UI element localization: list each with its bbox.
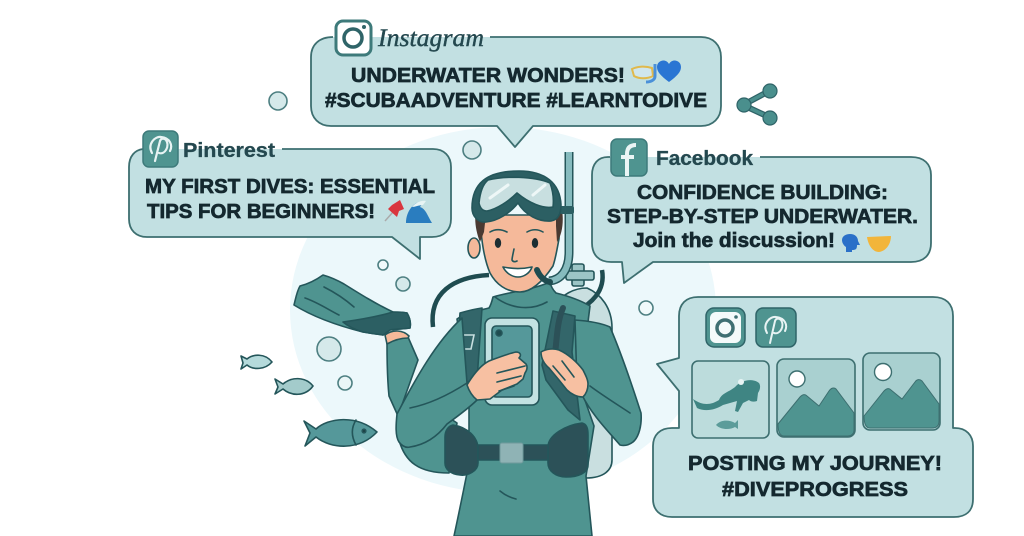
icon: pinterest small: [756, 308, 796, 347]
diver: [294, 152, 641, 536]
hair: [475, 210, 563, 242]
snorkel tube: [549, 152, 569, 281]
text: facebook post: [607, 182, 918, 252]
snorkel clip: [560, 206, 574, 214]
belt: [478, 445, 548, 460]
label: Facebook: Facebook: [656, 148, 754, 170]
label: Pinterest: Pinterest: [183, 140, 275, 162]
crotch line: [500, 491, 516, 499]
hand left: [467, 352, 527, 400]
fish: small: [241, 355, 272, 369]
icon: pinterest: [143, 131, 178, 167]
nose: [512, 249, 517, 262]
icon: instagram: [336, 21, 371, 55]
neck collar: [495, 297, 547, 308]
icon: handshake: [867, 236, 891, 252]
air hose right: [576, 270, 603, 312]
hand right: [541, 349, 588, 397]
regulator hoses on strap: [555, 308, 563, 354]
icon: share: [737, 84, 777, 125]
panel: posting journey bubble: [653, 297, 973, 517]
ear: [468, 238, 480, 258]
photo: mountains 1: [777, 359, 855, 437]
panel: facebook bubble: [592, 139, 931, 283]
text: instagram post: [325, 65, 707, 112]
harness strap left: [455, 308, 482, 384]
icon: wave: [406, 201, 432, 223]
elbow creases: [410, 383, 630, 413]
text: posting journey: POSTING MY JOURNEY!: [688, 453, 942, 475]
flipper: [294, 275, 410, 335]
bubbles: [269, 92, 653, 390]
icon: pushpin: [385, 200, 404, 221]
background water blob: [290, 127, 716, 493]
text: instagram post: UNDERWATER WONDERS!: [351, 65, 625, 87]
icon: speaking head: [842, 234, 860, 252]
face: [480, 215, 560, 292]
right arm: [575, 320, 641, 445]
phone case: [485, 318, 539, 405]
text: posting journey: [688, 453, 942, 501]
text: posting journey: #DIVEPROGRESS: [722, 479, 908, 501]
panel: instagram bubble: [311, 21, 721, 147]
icon: blue heart: [657, 60, 681, 82]
photo: diver: [692, 361, 769, 438]
diving mask: [472, 171, 561, 222]
wetsuit back: [399, 393, 457, 473]
weight pouch left: [445, 425, 478, 475]
label: Instagram: Instagram: [377, 25, 484, 52]
icon: instagram small: [706, 308, 745, 347]
harness strap right: [542, 311, 580, 420]
panel: pinterest bubble: [129, 131, 451, 259]
belt buckle: [500, 443, 523, 463]
text: facebook post: Join the discussion!: [633, 230, 835, 252]
snorkel mouthpiece: [537, 270, 550, 282]
text: pinterest post: MY FIRST DIVES: ESSENTIAL: [145, 176, 435, 198]
harness D ring: [461, 335, 474, 349]
text: pinterest post: [145, 176, 435, 223]
text: instagram post: #SCUBAADVENTURE #LEARNTODIVE: [325, 90, 707, 112]
left arm: [396, 318, 477, 447]
text: facebook post: CONFIDENCE BUILDING:: [637, 182, 888, 204]
icon: snorkel mask emoji: [632, 64, 655, 82]
torso and legs: [454, 282, 594, 536]
fish: medium: [275, 379, 313, 394]
eyebrows: [490, 230, 543, 232]
eyes: [495, 238, 538, 248]
air hose left: [433, 275, 489, 327]
text: facebook post: STEP-BY-STEP UNDERWATER.: [607, 206, 918, 228]
raised leg: [387, 337, 418, 416]
tank valve: [566, 264, 594, 286]
smile: [503, 267, 532, 277]
icon: facebook: [611, 139, 647, 176]
fish: large: [304, 420, 377, 446]
air tank: [553, 288, 612, 478]
text: pinterest post: TIPS FOR BEGINNERS!: [147, 201, 375, 223]
weight pouch right: [548, 423, 588, 477]
photo: mountains 2: [863, 353, 940, 430]
ankle skin: [385, 331, 409, 344]
